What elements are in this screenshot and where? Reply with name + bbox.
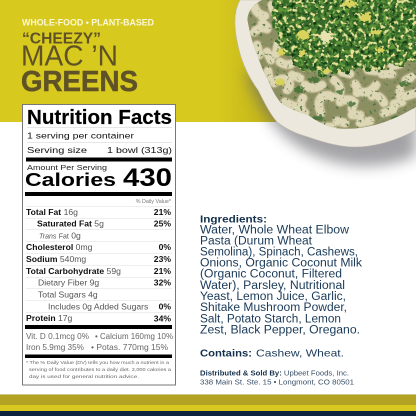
ingredients heading: Ingredients:	[200, 213, 267, 225]
row: sodium: Sodium 540mg	[26, 254, 86, 264]
row: cholesterol: Cholesterol 0mg	[26, 242, 93, 252]
vitamins and minerals: Vit. D 0.1mcg 0%	[26, 332, 89, 341]
allergens: Cashew, Wheat.	[256, 348, 344, 360]
row: dietary fiber	[38, 278, 171, 288]
footnote: * The % Daily Value (DV) tells you how much a nutrient in a	[26, 360, 169, 366]
row: total fat: Total Fat 16g	[26, 207, 78, 217]
title line: cheezy: “CHEEZY”	[22, 30, 101, 48]
elbow macaroni	[254, 5, 416, 127]
row: dietary fiber: Dietary Fiber 9g	[38, 278, 99, 288]
row: saturated fat	[37, 218, 171, 228]
bowl photo	[235, 0, 416, 166]
row: added sugars: 0%	[159, 302, 171, 312]
tagline: WHOLE-FOOD • PLANT-BASED	[22, 18, 154, 28]
row dividers	[26, 206, 172, 312]
ingredients list: Water), Parsley, Nutritional	[200, 280, 345, 292]
bowl shadow	[245, 70, 416, 166]
vitamins and minerals	[26, 332, 173, 352]
herb topping	[270, 0, 416, 76]
row: protein: Protein 17g	[26, 313, 73, 323]
serving size: 1 bowl (313g)	[107, 145, 172, 155]
row: total carbohydrate	[26, 266, 171, 276]
ingredients list: (Organic Coconut, Filtered	[200, 269, 342, 281]
calories	[25, 164, 172, 192]
ingredients list: Zest, Black Pepper, Oregano.	[200, 324, 360, 336]
calories: Amount Per Serving	[27, 165, 107, 172]
row: trans fat: Trans Fat 0g	[39, 230, 81, 240]
row: protein	[26, 313, 171, 324]
row: total fat: 21%	[154, 207, 171, 217]
row: saturated fat: 25%	[154, 218, 171, 228]
row: total sugars: Total Sugars 4g	[38, 290, 98, 300]
ingredients list: Yeast, Lemon Juice, Garlic,	[200, 291, 346, 303]
footer stripes	[0, 394, 416, 416]
row: added sugars: Includes 0g Added Sugars	[48, 302, 148, 312]
row: sodium: 23%	[154, 254, 171, 264]
heading: nutrition facts: Nutrition Facts	[27, 106, 172, 129]
serving size	[27, 145, 172, 155]
vitamins and minerals: Iron 5.9mg 35%	[26, 343, 84, 352]
row: saturated fat: Saturated Fat 5g	[37, 218, 104, 228]
ingredients list: Pasta (Durum Wheat	[200, 235, 313, 247]
nutrition facts panel	[22, 104, 176, 385]
row: sodium	[26, 254, 171, 264]
ingredients block	[200, 213, 362, 386]
distributor: Distributed & Sold By: Upbeet Foods, Inc.	[200, 371, 349, 378]
vitamins and minerals: • Potas. 770mg 15%	[91, 343, 168, 352]
serving size: Serving size	[27, 145, 87, 155]
row: protein: 34%	[154, 314, 171, 324]
footnote: serving of food contributes to a daily diet. 2,000 calories a	[29, 367, 171, 373]
allergens	[200, 348, 344, 360]
allergens: Contains:	[200, 348, 252, 360]
row: total fat	[26, 207, 171, 217]
panel box	[22, 104, 176, 385]
lemon zest and crumbs	[275, 1, 384, 86]
yellow header background	[0, 0, 300, 122]
row: cholesterol: 0%	[159, 242, 171, 252]
herb flecks on pasta	[240, 0, 416, 135]
row: cholesterol	[26, 242, 171, 252]
daily value header: % Daily Value*	[136, 199, 172, 205]
title line: greens: GREENS	[21, 66, 138, 98]
footnote	[26, 360, 171, 380]
ingredients list: Salt, Potato Starch, Lemon	[200, 313, 341, 325]
distributor: 338 Main St. Ste. 15 • Longmont, CO 80501	[200, 379, 354, 386]
ingredients list	[200, 224, 362, 336]
bowl rim	[235, 0, 416, 147]
distributor	[200, 371, 354, 386]
ingredients list: Shitake Mushroom Powder,	[200, 302, 347, 314]
ingredients list: Semolina), Spinach, Cashews,	[200, 247, 358, 259]
green herb patches on pasta	[294, 77, 410, 121]
footnote: day is used for general nutrition advice.	[29, 374, 139, 380]
calories: 430	[123, 164, 172, 192]
ingredients list: Onions, Organic Coconut Milk	[200, 258, 362, 270]
row: total carbohydrate: Total Carbohydrate 59g	[26, 266, 121, 276]
ingredients list: Water, Whole Wheat Elbow	[200, 224, 350, 236]
row: total carbohydrate: 21%	[154, 266, 171, 276]
pasta and greens	[240, 0, 416, 135]
heading: product title	[21, 18, 154, 98]
row: dietary fiber: 32%	[154, 278, 171, 288]
servings per container: 1 serving per container	[27, 130, 134, 140]
calories: Calories	[25, 169, 116, 190]
vitamins and minerals: • Calcium 160mg 10%	[95, 332, 173, 341]
title line: mac 'n: MAC ’N	[21, 40, 118, 72]
